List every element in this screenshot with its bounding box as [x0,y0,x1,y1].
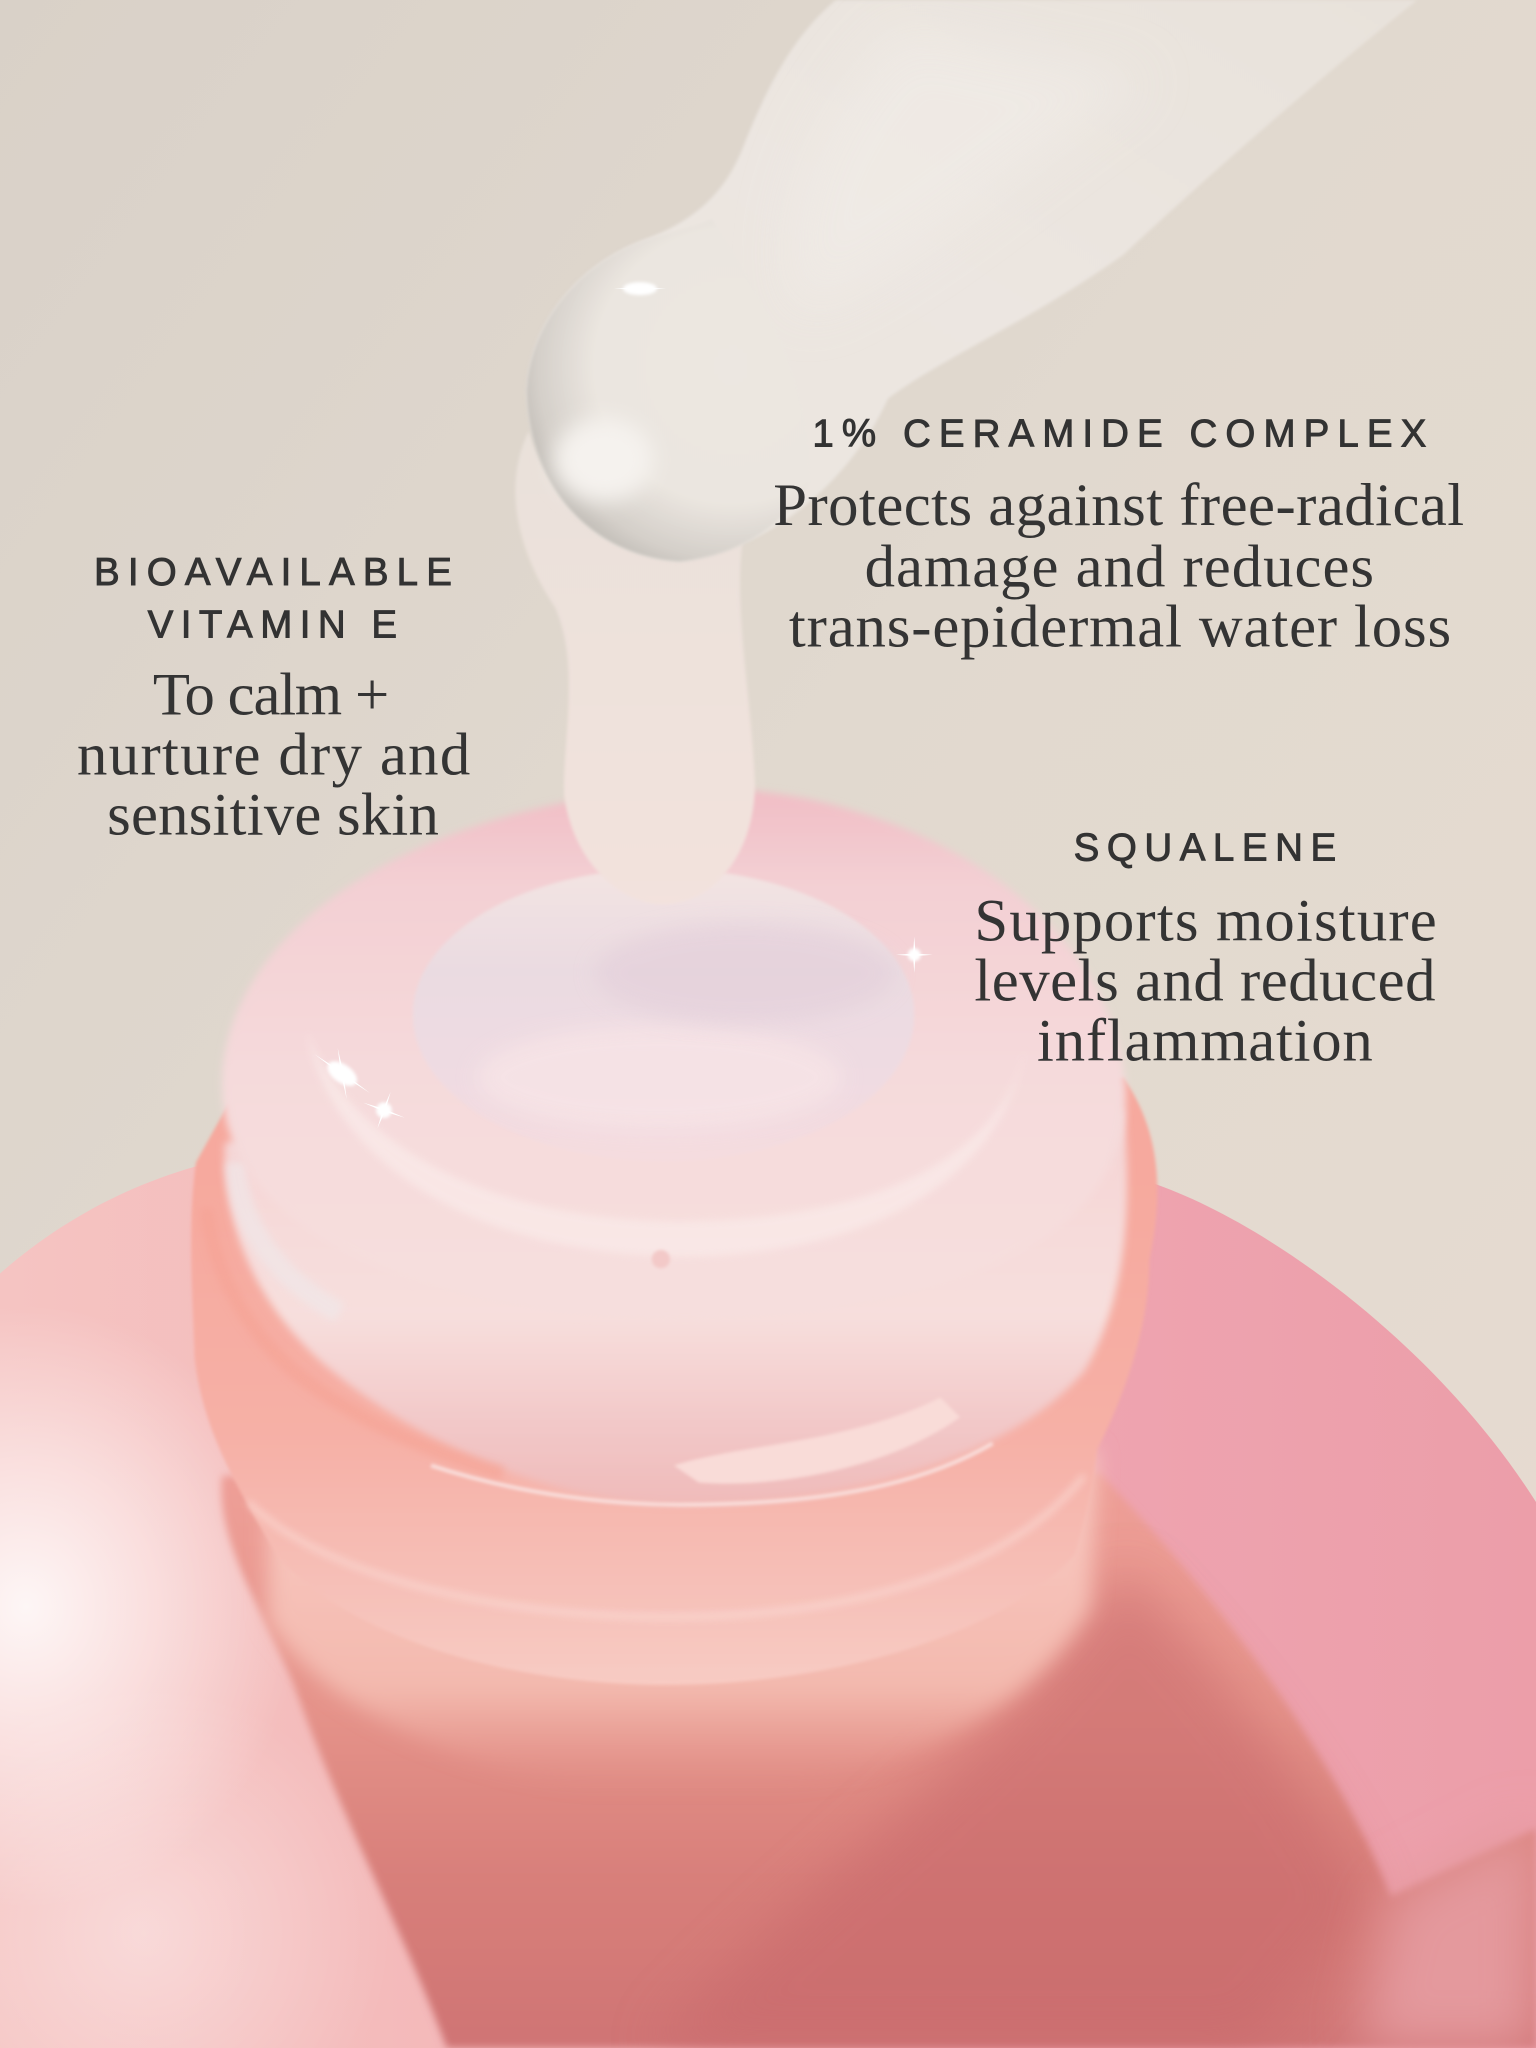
heading: VITAMIN E [148,603,397,646]
lower right bottle tint [1358,1822,1536,2048]
well reflection [477,1025,842,1130]
callout: ceramide complex [773,413,1464,661]
sparkles [314,282,933,1129]
lower shimmer [0,1685,392,2048]
glass bulb [526,219,810,562]
well shade [594,923,895,1023]
bottle lip [222,788,1126,1319]
description: To calm + [153,661,389,728]
bulb highlight [554,418,653,502]
description: damage and reduces [865,533,1374,600]
description: sensitive skin [107,782,439,849]
pipette soft light [789,26,1149,313]
bottle neck [268,1450,1097,1796]
dropper pipette [526,0,1417,562]
description [773,472,1464,661]
heading: 1% CERAMIDE COMPLEX [812,413,1426,456]
description [974,887,1437,1075]
serum drip [515,431,755,904]
upper collar ring [206,1045,1127,1505]
orange left band [206,1208,503,1473]
description [77,661,470,849]
description: Supports moisture [974,887,1437,954]
shimmer highlight [0,1306,300,1907]
heading: BIOAVAILABLE [94,551,452,594]
description: nurture dry and [77,722,470,789]
heading: SQUALENE [1074,827,1336,870]
inner well [413,869,914,1161]
lower collar ring [191,1078,1157,1685]
front rim line [431,1443,993,1505]
shadow deep area [653,1567,1371,2048]
description: trans-epidermal water loss [789,594,1451,661]
callout: vitamin e [77,551,470,849]
inner ring highlight [307,1032,1025,1256]
ring rim line [248,1476,1084,1617]
glass reflection [674,1398,960,1484]
description: Protects against free-radical [773,472,1464,539]
droplet beads [652,1250,670,1268]
description: levels and reduced [974,947,1435,1014]
heading [94,551,452,646]
bottle shadow [221,1473,1536,2048]
callout: squalene [974,827,1437,1075]
bottle shoulder [0,1166,1536,2048]
description: inflammation [1037,1008,1373,1075]
glass edge glint [235,1162,340,1313]
